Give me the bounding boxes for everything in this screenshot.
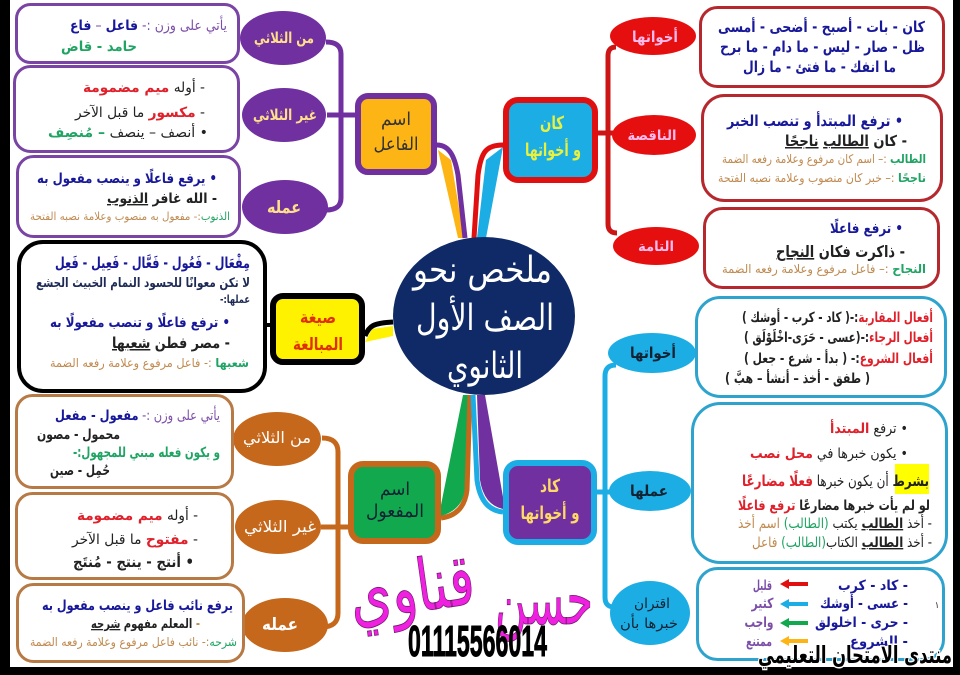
arrow: gold <box>780 636 808 646</box>
panel: عمل كاد: - أخذ الطالب يكتب (الطالب) اسم أخذ <box>738 514 932 532</box>
panel: اسم الفاعل من الثلاثي <box>16 4 238 62</box>
ellipse: غير الثلاثي brown <box>235 500 321 554</box>
signature: حسن قناوي: حسن <box>495 557 593 642</box>
node: صيغة المبالغة: صيغة <box>300 308 336 328</box>
node: كاد وأخواتها: و أخواتها <box>520 501 580 524</box>
ellipse: التامة: التامة <box>638 239 674 255</box>
panel: أخوات كان <box>700 8 944 86</box>
ellipse: من الثلاثي brown: من الثلاثي <box>243 428 311 448</box>
panel: اقتران خبرها بأن: - كاد - كرب <box>838 578 908 594</box>
connector: spine blue <box>597 365 616 607</box>
panel: اقتران خبرها بأن: ١ <box>935 601 939 611</box>
panel: أخوات كاد: أفعال الرجاء:-(عسى - حَرَى-اخْلَوْلَق ) <box>744 328 933 346</box>
connector: central circle to صيغة المبالغة <box>365 322 393 342</box>
ellipse: عمله brown <box>242 598 328 652</box>
panel: اقتران خبرها بأن: ممتنع <box>746 634 772 650</box>
panel: اسم الفاعل من الثلاثي: يأتي على وزن :- فاعل – فاع <box>70 15 227 34</box>
ellipse: أخواتها blue: أخواتها <box>630 343 676 362</box>
arrow: green <box>780 618 808 628</box>
panel: عمل اسم المفعول: يرفع نائب فاعل و ينصب مفعول به <box>42 598 233 614</box>
ellipse: أخواتها red: أخواتها <box>632 27 678 46</box>
node: صيغة المبالغة <box>273 296 362 362</box>
arrow: blue <box>780 599 808 609</box>
node: اسم المفعول <box>351 464 438 541</box>
connector: central circle to اسم المفعول <box>441 395 470 518</box>
ellipse: عمله purple: عمله <box>267 198 301 218</box>
node: كان وأخواتها <box>506 100 595 180</box>
ellipse: من الثلاثي purple: من الثلاثي <box>254 29 314 47</box>
panel: عمل اسم المفعول <box>18 584 244 662</box>
panel: اسم المفعول من الثلاثي: و يكون فعله مبني للمجهول:- <box>73 445 220 461</box>
ellipse: الناقصة <box>612 115 696 155</box>
panel: كان الناقصة: ناجحًا :– خبر كان منصوب وعلامة نصبه الفتحة <box>718 171 926 186</box>
panel: اقتران خبرها بأن: كثير <box>751 596 774 612</box>
ellipse: اقتران خبرها بأن: خبرها بأن <box>620 613 678 632</box>
ellipse: من الثلاثي purple <box>240 11 326 65</box>
panel: عمل اسم الفاعل: • يرفع فاعلًا و ينصب مفعول به <box>37 168 217 187</box>
panel: كان التامة <box>704 208 938 288</box>
panel: اسم المفعول غير الثلاثي: • أنتج - ينتج - مُنتَج <box>73 552 194 571</box>
panel: أخوات كاد <box>696 298 946 396</box>
ellipse: عمله purple <box>242 180 328 234</box>
arrow: red <box>780 579 808 589</box>
panel: عمل اسم الفاعل <box>18 156 240 236</box>
ellipse: أخواتها blue <box>608 333 696 373</box>
panel: عمل كاد: بشرط أن يكون خبرها فعلًا مضارعًا <box>742 470 929 490</box>
panel: كان التامة: • ترفع فاعلًا <box>830 218 903 237</box>
node: اسم الفاعل: اسم <box>381 109 411 130</box>
panel: عمل اسم المفعول: - المعلم مفهوم شرحه <box>91 617 200 632</box>
connector: central circle to كاد وأخواتها <box>473 395 503 512</box>
panel: أخوات كاد: أفعال الشروع:- ( بدأ - شرع - جعل ) <box>744 349 933 367</box>
ellipse: عملها: عملها <box>630 482 668 500</box>
node: كان وأخواتها: كان <box>540 113 564 134</box>
panel: اسم المفعول غير الثلاثي <box>16 494 232 578</box>
panel: عمل اسم المفعول: شرحه:- نائب فاعل مرفوع وعلامة رفعه الضمة <box>30 635 237 650</box>
node: اسم الفاعل: الفاعل <box>374 134 418 155</box>
panel: صيغة المبالغة: • ترفع فاعلًا و تنصب مفعولًا به <box>50 312 230 331</box>
panel: عمل كاد: لو لم يأت خبرها مضارعًا ترفع فاعلًا <box>738 495 930 514</box>
connector: spine purple <box>326 42 355 210</box>
panel: عمل اسم الفاعل: الذنوب:- مفعول به منصوب وعلامة نصبه الفتحة <box>30 210 230 223</box>
panel: كان الناقصة: الطالب :– اسم كان مرفوع وعلامة رفعه الضمة <box>722 152 926 167</box>
connector: spine brown <box>321 438 348 627</box>
connector: central circle to اسم الفاعل <box>437 145 465 238</box>
panel: صيغة المبالغة: عملها:- <box>220 293 250 306</box>
ellipse: عمله brown: عمله <box>262 615 298 635</box>
panel: أخوات كان: ظل - صار - ليس - ما دام - ما برح <box>720 38 925 56</box>
panel: اسم المفعول من الثلاثي: حُمِل - صين <box>50 463 110 479</box>
central title circle: الصف الأول <box>416 295 554 339</box>
panel: أخوات كان: كان - بات - أصبح - أضحى - أمسى <box>718 17 925 36</box>
ellipse: التامة <box>613 227 699 265</box>
panel: اسم المفعول غير الثلاثي: - أوله ميم مضمومة <box>77 506 198 524</box>
panel: أخوات كاد: أفعال المقاربة:-( كاد - كرب - أوشك ) <box>742 308 933 326</box>
panel: اسم الفاعل غير الثلاثي: - مكسور ما قبل الآخر <box>74 105 205 121</box>
ellipse: من الثلاثي brown <box>233 412 321 466</box>
ellipse: اقتران خبرها بأن <box>610 581 690 645</box>
panel: عمل كاد: • ترفع المبتدأ <box>830 419 908 437</box>
panel: اقتران خبرها بأن: قليل <box>753 578 772 594</box>
panel: كان التامة: النجاح :– فاعل مرفوع وعلامة رفعه الضمة <box>722 262 926 277</box>
panel: اقتران خبرها بأن: - الشروع <box>850 634 908 650</box>
signature: حسن قناوي <box>343 537 593 642</box>
panel: كان الناقصة: • ترفع المبتدأ و تنصب الخبر <box>726 111 903 130</box>
panel: صيغة المبالغة: مِفْعَال - فَعُول - فَعَّال - فَعِيل - فَعِل <box>55 253 250 272</box>
node: كان وأخواتها: و أخواتها <box>525 138 581 161</box>
ellipse: الناقصة: الناقصة <box>628 128 676 144</box>
central title circle: ملخص نحو <box>411 250 552 291</box>
ellipse: عملها <box>609 471 691 511</box>
ellipse: اقتران خبرها بأن: اقتران <box>634 596 670 612</box>
signature: حسن قناوي: قناوي <box>343 537 480 639</box>
node: اسم الفاعل <box>358 96 434 172</box>
panel: اسم الفاعل من الثلاثي: حامد - قاض <box>61 39 137 55</box>
panel: عمل اسم الفاعل: - الله غافر الذنوب <box>107 191 217 207</box>
panel: أخوات كان: ما انفك - ما فتئ - ما زال <box>743 58 896 76</box>
ellipse: غير الثلاثي purple: غير الثلاثي <box>253 106 317 124</box>
panel: اقتران خبرها بأن <box>698 568 944 660</box>
node: اسم المفعول: المفعول <box>366 501 424 522</box>
ellipse: أخواتها red <box>610 17 696 55</box>
node: اسم المفعول: اسم <box>380 479 410 500</box>
panel: عمل كاد: • يكون خبرها في محل نصب <box>750 446 908 462</box>
node: صيغة المبالغة: المبالغة <box>293 335 343 355</box>
panel: كان الناقصة <box>702 96 942 200</box>
panel: أخوات كاد: ( طفق - أخذ – أنشأ – هبَّ ) <box>725 369 870 387</box>
node: كاد وأخواتها: كاد <box>540 476 560 497</box>
ellipse: غير الثلاثي purple <box>242 88 326 142</box>
central title circle: الثانوي <box>447 346 523 387</box>
ellipse: غير الثلاثي brown: غير الثلاثي <box>244 517 316 537</box>
panel: اقتران خبرها بأن: - عسى - أوشك <box>820 594 908 612</box>
node: كاد وأخواتها <box>506 463 594 542</box>
panel: صيغة المبالغة: شعبها :- فاعل مرفوع وعلامة رفعه الضمة <box>50 356 249 371</box>
panel: صيغة المبالغة: لا تكن معوانًا للحسود النمام الخبيث الجشع <box>36 276 250 291</box>
connector: spine red <box>598 47 617 233</box>
panel: كان التامة: - ذاكرت فكان النجاح <box>776 242 905 261</box>
panel: اسم الفاعل غير الثلاثي: - أوله ميم مضمومة <box>83 78 205 96</box>
panel: اقتران خبرها بأن: واجب <box>744 615 774 631</box>
panel: اسم المفعول غير الثلاثي: - مفتوح ما قبل الآخر <box>71 532 198 548</box>
panel: صيغة المبالغة: - مصر فطن شعبها <box>112 334 230 352</box>
panel: اسم المفعول من الثلاثي: محمول - مصون <box>37 427 120 443</box>
panel: صيغة المبالغة <box>19 242 265 391</box>
panel: كان الناقصة: - كان الطالب ناجحًا <box>785 132 907 150</box>
panel: اقتران خبرها بأن: - حرى - اخلولق <box>815 615 908 631</box>
panel: اسم الفاعل غير الثلاثي: • أنصف – ينصف – مُنصِف <box>48 123 208 141</box>
panel: اسم المفعول من الثلاثي <box>16 396 232 488</box>
panel: اسم الفاعل غير الثلاثي <box>14 66 238 152</box>
phone number: 01115566014 <box>408 617 547 666</box>
connector: central circle to كان وأخواتها <box>474 145 503 238</box>
panel: اسم المفعول من الثلاثي: يأتي على وزن :- مفعول - مفعل <box>55 405 220 424</box>
central title circle <box>393 237 575 395</box>
connector: black box link <box>266 323 272 327</box>
panel: عمل كاد <box>692 404 946 562</box>
panel: عمل كاد: - أخذ الطالب الكتاب(الطالب) فاعل <box>752 533 932 551</box>
